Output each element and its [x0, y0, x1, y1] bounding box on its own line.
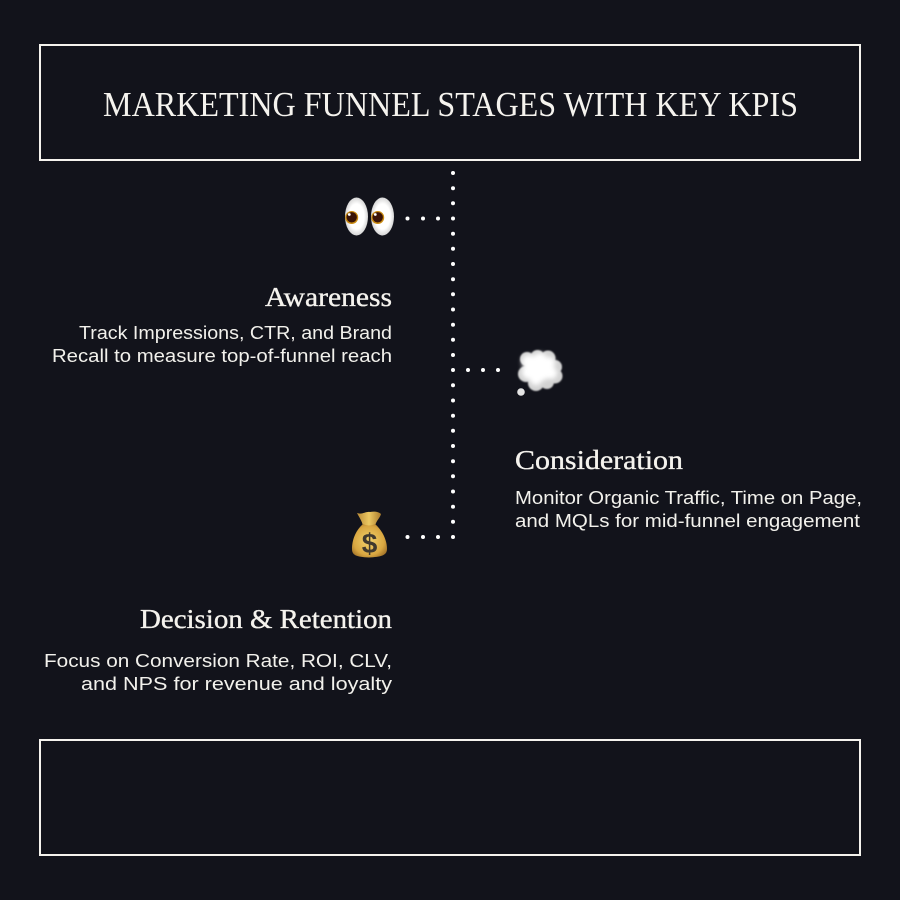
heading: awareness: Awareness — [265, 282, 392, 312]
description: decision and retention: Focus on Conversion Rate, ROI, CLV, — [44, 650, 392, 671]
decision and retention text block — [44, 604, 393, 694]
description: awareness: Recall to measure top-of-funnel reach — [52, 345, 392, 366]
title: MARKETING FUNNEL STAGES WITH KEY KPIS — [103, 85, 798, 124]
connector: consideration — [466, 368, 500, 372]
description: consideration: Monitor Organic Traffic, Time on Page, — [515, 487, 862, 508]
icon: thought bubble — [517, 350, 562, 396]
empty footer panel — [40, 740, 860, 855]
icon: money bag: $ — [362, 528, 378, 559]
description: consideration — [515, 487, 862, 531]
description: decision and retention — [44, 650, 393, 694]
icon: money bag — [352, 512, 387, 559]
heading: consideration: Consideration — [515, 445, 684, 475]
connector: awareness — [406, 216, 440, 220]
icon: eyes — [345, 198, 394, 236]
connector: decision — [406, 535, 440, 539]
dotted vertical connector — [451, 171, 455, 539]
awareness text block — [52, 282, 392, 366]
description: awareness: Track Impressions, CTR, and Brand — [79, 322, 392, 343]
consideration text block — [515, 445, 862, 531]
description: awareness — [52, 322, 392, 366]
title panel — [40, 45, 860, 160]
description: decision and retention: and NPS for revenue and loyalty — [81, 673, 393, 694]
description: consideration: and MQLs for mid-funnel engagement — [515, 510, 860, 531]
heading: decision and retention: Decision & Retention — [140, 604, 393, 634]
